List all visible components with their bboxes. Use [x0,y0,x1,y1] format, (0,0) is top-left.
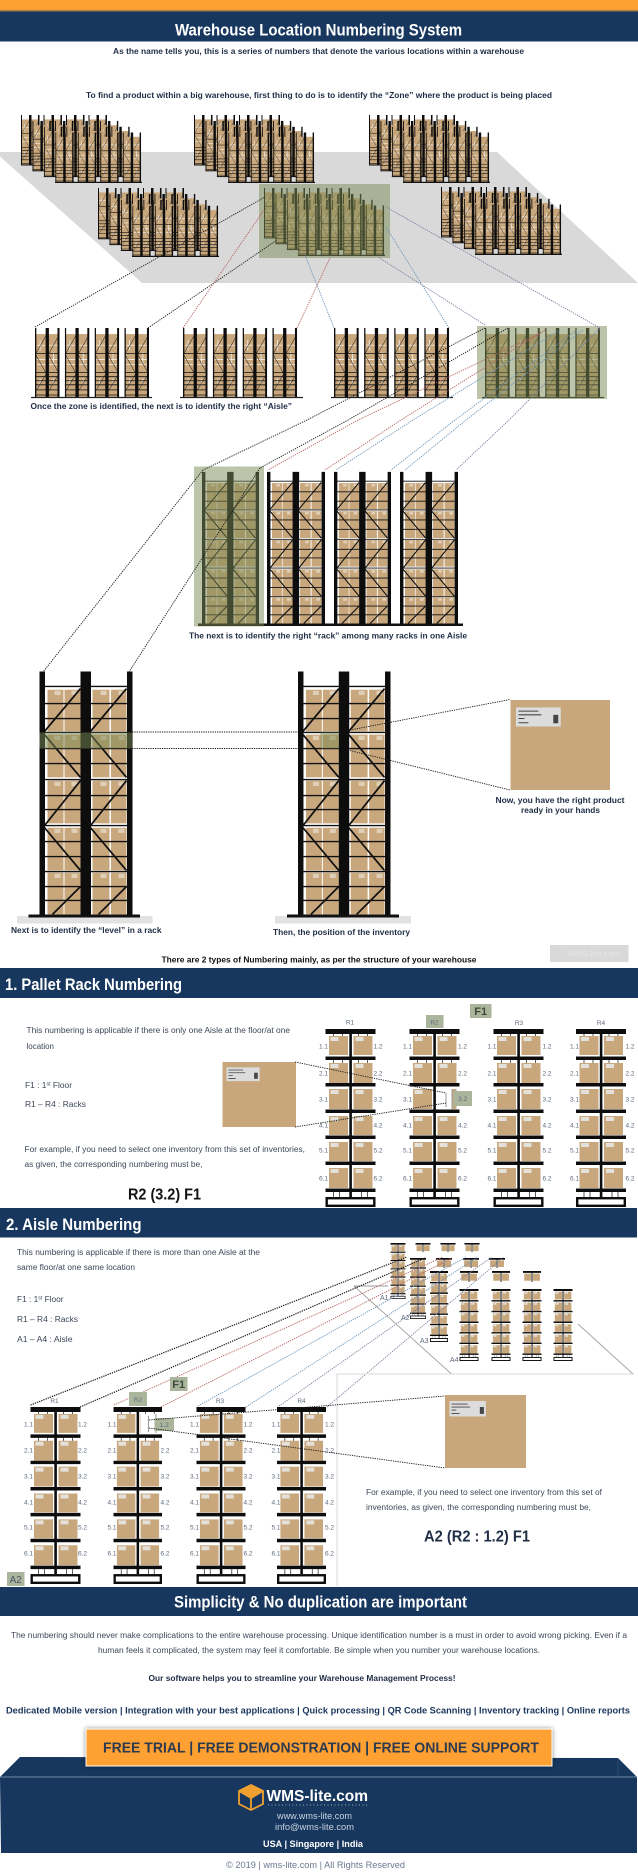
product box [510,700,610,790]
aisle rack R2: R2 [134,1397,143,1404]
pallet rack R4: 5.1 [570,1148,579,1154]
aisle example text [366,1488,603,1512]
pallet rack R3: 5.1 [487,1148,497,1154]
aisle A3: A3 [420,1338,429,1345]
aisle rack R4: 1.2 [325,1422,334,1428]
locations: USA | Singapore | India [263,1839,364,1849]
pallet rack R3: 3.1 [487,1096,497,1104]
level caption: Next is to identify the “level” in a rack [11,926,162,935]
call to action banner: FREE TRIAL | FREE DEMONSTRATION | FREE ONLINE SUPPORT [103,1740,539,1756]
pallet rack R4: R4 [597,1020,606,1027]
pallet rack R1: 5.2 [373,1148,383,1154]
pallet rack explanation: Floor [51,1081,72,1090]
pallet rack R3: 1.1 [487,1044,497,1050]
overview connector lines [30,1257,504,1407]
call to action banner [86,1729,552,1766]
aisle rack R3 [190,1398,253,1583]
pallet rack explanation: as given, the corresponding numbering must be, [24,1160,202,1169]
floor tag F1 [170,1377,188,1391]
base [287,914,399,918]
aisle explanation [17,1248,261,1344]
simplicity paragraph [11,1631,628,1655]
footer panel [0,1757,637,1853]
rack highlight [194,466,264,626]
pallet rack R1: 1.1 [319,1044,328,1050]
pallet rack R3: 4.2 [542,1122,552,1130]
floor [0,152,638,283]
aisle rack R2: 4.2 [160,1500,170,1506]
aisle rack R3: 5.1 [190,1524,199,1532]
pallet rack R1: 6.2 [373,1176,383,1182]
aisle code: A2 (R2 : 1.2) F1 [424,1528,530,1546]
aisle rack R4: 6.2 [325,1550,334,1558]
pallet rack R3: 2.2 [542,1070,552,1078]
pallet rack R4: 4.2 [625,1122,635,1130]
rack base [198,624,463,626]
rack 3 [334,472,391,625]
section header: simplicity: Simplicity & No duplication are important [174,1594,467,1612]
pallet rack R1: 2.1 [319,1070,328,1078]
aisle A1 [380,1243,480,1302]
aisle rack R1: 1.1 [24,1422,33,1428]
aisle rack R4 [271,1398,334,1583]
aisle rack R1: 4.2 [78,1500,87,1506]
aisle A2 [401,1258,505,1322]
rack caption: The next is to identify the right “rack” among many racks in one Aisle [189,632,468,640]
aisle row [31,326,607,399]
aisle rack R4: 2.1 [271,1448,281,1454]
pallet rack R1: 1.2 [373,1044,383,1050]
pallet rack R4: 4.1 [570,1122,579,1130]
position caption: Then, the position of the inventory [273,928,411,937]
pallet rack R2: R2 [430,1020,439,1026]
pallet rack R3: R3 [515,1020,524,1027]
pallet rack R1: 3.1 [319,1096,328,1104]
zone 4 [98,188,219,257]
floor shadow [17,916,152,924]
mini aisles overview [380,1243,577,1364]
aisle rack R3: 1.1 [190,1422,199,1428]
pallet rack explanation: R1 – R4 : Racks [25,1100,86,1109]
position tag 3.2 [454,1091,472,1106]
rack 4 [400,472,458,625]
level highlight [40,732,132,748]
pallet rack R4: 2.2 [625,1070,635,1078]
watermark: WMS-lite.com [567,948,620,958]
section header: aisle numbering [0,1208,637,1238]
aisle 4 [485,328,600,397]
rack 2 [267,472,325,625]
pallet rack R2: 1.2 [458,1044,467,1050]
aisle rack R1: 5.2 [78,1524,87,1532]
dark floor tick [354,1285,388,1287]
aisle rack R2 [107,1392,170,1583]
zone instruction: To find a product within a big warehouse, first thing to do is to identify the “Zone” where the product is being placed [86,91,552,100]
pallet rack R1: 5.1 [319,1148,328,1154]
pallet rack R4: 5.2 [625,1148,635,1154]
product caption: Now, you have the right product [496,796,625,805]
section header: pallet rack numbering [0,968,638,998]
aisle caption: Once the zone is identified, the next is to identify the right “Aisle” [30,402,292,411]
pallet example box [222,1062,296,1127]
aisle rack R2: 2.1 [107,1448,117,1454]
base [28,914,140,918]
aisle highlight [477,326,607,399]
aisle explanation: This numbering is applicable if there is more than one Aisle at the [17,1248,261,1257]
rack to level connector lines [43,468,510,790]
pallet rack R4: 6.2 [625,1176,635,1182]
pallet rack R3 [487,1020,552,1206]
simplicity paragraph: The numbering should never make complications to the entire warehouse processing. Unique identification number is a must in order to avoid wrong picking. Even if a [11,1631,628,1640]
position tag 1.2 [154,1418,174,1431]
aisle rack R2: 6.1 [107,1550,117,1558]
aisle rack R1: 6.1 [24,1550,33,1558]
product caption: ready in your hands [521,806,601,815]
aisle example text: For example, if you need to select one inventory from this set of [366,1488,603,1497]
software sentence: Our software helps you to streamline your Warehouse Management Process! [148,1674,456,1683]
aisle 2 [183,328,297,397]
zone to aisle connector lines [35,197,600,328]
aisle rack R4: 1.1 [271,1422,281,1428]
pallet rack R1: 6.1 [319,1176,328,1182]
pallet rack R3: 4.1 [487,1122,497,1130]
level rack [17,672,152,924]
aisle rack R1 [24,1398,87,1583]
contact details: www.wms-lite.com [276,1811,352,1821]
warehouse floor with zones [0,115,638,283]
section header: simplicity [0,1587,638,1616]
aisle rack R1: 5.1 [24,1524,33,1532]
aisle base lines [31,396,604,398]
section header: pallet rack numbering: 1. Pallet Rack Numbering [5,976,182,994]
pallet rack explanation: This numbering is applicable if there is only one Aisle at the floor/at one [26,1026,291,1035]
floor shadow [275,916,411,924]
pallet rack R3: 5.2 [542,1148,552,1154]
aisle rack R1: 3.1 [24,1474,33,1480]
aisle rack R4: R4 [297,1398,306,1405]
aisle rack R2: 1.1 [107,1422,117,1428]
pallet rack R2 [403,1015,467,1206]
contact details: info@wms-lite.com [275,1822,354,1832]
rack 1 [202,472,259,625]
zone 3 [369,115,490,183]
pallet rack explanation [24,1026,305,1169]
aisle rack R2: 5.2 [160,1524,170,1532]
pallet rack R2: 3.1 [403,1096,412,1104]
pallet rack R2: 6.1 [403,1176,412,1182]
zone 5 selected [264,188,385,256]
pallet rack R2: 1.1 [403,1044,412,1050]
title: Warehouse Location Numbering System [175,20,462,40]
aisle rack R3: 6.1 [190,1550,199,1558]
aisle rack R1: R1 [50,1398,59,1405]
pallet rack R1: 4.2 [373,1122,383,1130]
aisle rack R3: 3.1 [190,1474,199,1480]
aisle rack R3: 5.2 [243,1524,253,1532]
pallet rack R3: 3.2 [542,1096,552,1104]
pallet rack R2: 5.2 [458,1148,467,1154]
aisle rack R4: 3.2 [325,1474,334,1480]
position highlight [320,732,339,748]
title bar [0,10,638,42]
rack [298,672,390,916]
pallet rack explanation: location [26,1042,54,1051]
aisle rack R4: 5.1 [271,1524,281,1532]
pallet rack R2: 4.2 [458,1122,467,1130]
aisle rack R3: 2.2 [243,1448,253,1454]
aisle rack R3: 3.2 [243,1474,253,1480]
pallet rack R2: 4.1 [403,1122,412,1130]
aisle to rack connector lines [203,328,600,470]
rack [40,672,132,916]
aisle rack R1: 6.2 [78,1550,87,1558]
aisle rack R3: 2.1 [190,1448,199,1454]
position rack [275,672,411,924]
aisle explanation: F1 : 1 [17,1295,37,1304]
pallet rack R1: 2.2 [373,1070,383,1078]
aisle rack R4: 5.2 [325,1524,334,1532]
pallet rack R1: 3.2 [373,1096,383,1104]
aisle tag A2 [7,1572,24,1586]
aisle A2: A2 [401,1315,410,1322]
aisle rack R4: 6.1 [271,1550,281,1558]
aisle rack R1: 1.2 [78,1422,87,1428]
aisle rack R3: R3 [216,1398,225,1405]
pallet example connector lines [295,1062,446,1127]
aisle A4: A4 [450,1357,459,1364]
aisle 1 [35,328,149,397]
aisle rack R2: 3.2 [160,1474,170,1480]
pallet rack R3: 6.2 [542,1176,552,1182]
aisle example box [445,1395,526,1468]
aisle rack R2: 4.1 [107,1500,117,1506]
floor outline of aisles [354,1286,633,1374]
numbering types sentence: There are 2 types of Numbering mainly, as per the structure of your warehouse [162,956,477,964]
pallet rack R4: 1.1 [570,1044,579,1050]
pallet rack R4: 1.2 [625,1044,635,1050]
zone 1 [21,115,142,183]
pallet rack R3: 2.1 [487,1070,497,1078]
contact details [275,1811,354,1832]
floor tag F1: F1 [172,1379,185,1391]
position tag 3.2: 3.2 [458,1096,468,1103]
feature list: Dedicated Mobile version | Integration with your best applications | Quick processing | QR Code Scanning | Inventory tracking | Online reports [6,1706,630,1716]
pallet rack R2: 2.1 [403,1070,412,1078]
intro sentence: As the name tells you, this is a series of numbers that denote the various locations within a warehouse [113,47,525,56]
aisle 3 [334,328,449,397]
aisle rack R3: 4.2 [243,1500,253,1506]
zone 6 [441,187,562,255]
pallet rack R2: 5.1 [403,1148,412,1154]
aisle rack R3: 1.2 [243,1422,253,1428]
aisle rack R2: 6.2 [160,1550,170,1558]
pallet rack R1: R1 [346,1020,355,1026]
pallet rack explanation: F1 : 1 [25,1081,45,1090]
aisle rack R2: 2.2 [160,1448,170,1454]
aisle rack R4: 2.2 [325,1448,334,1454]
aisle explanation: st [38,1296,43,1302]
pallet rack R4: 6.1 [570,1176,579,1182]
pallet rack R1: 4.1 [319,1122,328,1130]
example panel outline [337,1374,633,1586]
aisle explanation: A1 – A4 : Aisle [17,1335,73,1344]
aisle explanation: same floor/at one same location [17,1263,135,1272]
product caption [496,796,625,815]
pallet rack code: R2 (3.2) F1 [128,1186,201,1204]
aisle A4 [450,1283,577,1364]
pallet rack R4: 2.1 [570,1070,579,1078]
aisle rack R1: 4.1 [24,1500,33,1506]
rack row [194,466,463,626]
pallet rack R4: 3.1 [570,1096,579,1104]
watermark [550,945,628,962]
aisle A3 [420,1271,541,1345]
zone 2 [194,115,315,183]
aisle rack R1: 2.1 [24,1448,33,1454]
aisle rack R3: 4.1 [190,1500,199,1506]
simplicity paragraph: human feels it complicated, the system may feel it comfortable. Be simple when you number your warehouse locations. [98,1646,540,1655]
aisle rack R4: 4.1 [271,1500,281,1506]
floor tag F1: F1 [474,1006,487,1018]
aisle rack R1: 2.2 [78,1448,87,1454]
aisle rack R4: 4.2 [325,1500,334,1506]
pallet rack R3: 6.1 [487,1176,497,1182]
pallet rack R4: 3.2 [625,1096,635,1104]
aisle tag A2: A2 [10,1575,22,1586]
pallet rack R3: 1.2 [542,1044,552,1050]
aisle rack R2: 5.1 [107,1524,117,1532]
floor tag F1 [470,1004,492,1018]
icon: logo cube [239,1785,263,1810]
top orange band [0,0,638,10]
pallet rack explanation: For example, if you need to select one inventory from this set of inventories, [24,1145,305,1154]
aisle rack R1: 3.2 [78,1474,87,1480]
aisle explanation: Floor [42,1295,64,1304]
pallet rack R2: 6.2 [458,1176,467,1182]
logo text: WMS-lite.com [266,1788,368,1805]
pallet rack R4 [570,1020,635,1206]
pallet rack explanation: st [46,1082,51,1088]
aisle rack R2: 3.1 [107,1474,117,1480]
aisle example text: inventories, as given, the corresponding numbering must be, [366,1503,591,1512]
pallet rack R1 [319,1020,383,1206]
section header: aisle numbering: 2. Aisle Numbering [6,1216,142,1234]
aisle rack R3: 6.2 [243,1550,253,1558]
position tag 1.2: 1.2 [160,1422,169,1429]
zone highlight [259,184,390,258]
copyright: © 2019 | wms-lite.com | All Rights Reserved [226,1860,405,1870]
pallet rack R2: 2.2 [458,1070,467,1078]
aisle example connector lines [149,1396,445,1468]
aisle rack R4: 3.1 [271,1474,281,1480]
aisle A1: A1 [380,1295,389,1302]
aisle explanation: R1 – R4 : Racks [17,1315,78,1324]
